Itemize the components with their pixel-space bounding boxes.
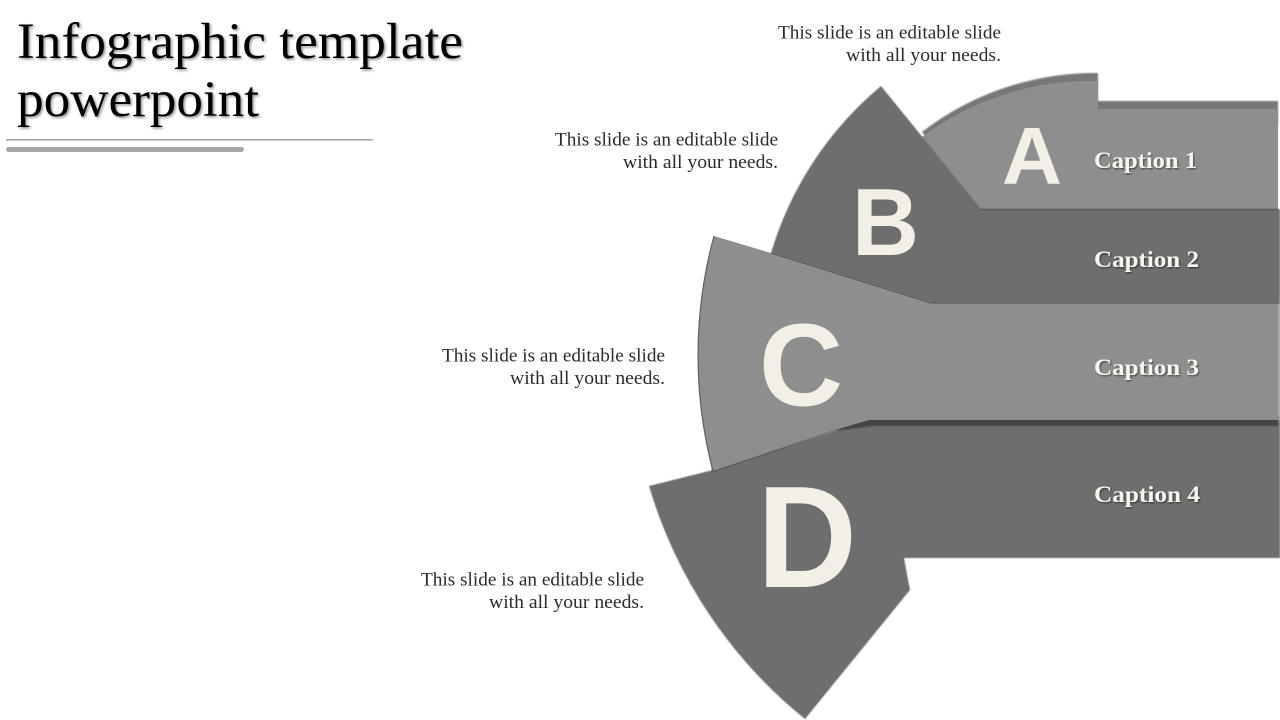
text block D — [421, 570, 644, 613]
title — [17, 14, 463, 128]
letter D: D — [757, 456, 857, 618]
segment D — [649, 420, 1280, 719]
caption 4: Caption 4 — [1094, 482, 1201, 507]
text block C: with all your needs. — [510, 368, 665, 389]
segment C — [698, 236, 1279, 472]
title: Infographic template — [17, 14, 463, 70]
text block B: This slide is an editable slide — [555, 130, 778, 150]
title: powerpoint — [17, 72, 259, 128]
text block A — [778, 22, 1001, 66]
segment B — [771, 86, 1280, 303]
caption 1: Caption 1 — [1094, 148, 1197, 173]
caption 3: Caption 3 — [1094, 355, 1199, 380]
letter B: B — [852, 169, 919, 276]
text block A: This slide is an editable slide — [778, 22, 1001, 44]
letter A: A — [1002, 112, 1062, 202]
caption 2: Caption 2 — [1094, 247, 1199, 272]
text block A: with all your needs. — [846, 45, 1001, 66]
text block B — [555, 130, 778, 173]
text block C — [442, 346, 665, 389]
text block D: with all your needs. — [489, 592, 644, 613]
text block B: with all your needs. — [623, 152, 778, 173]
segment A — [922, 73, 1278, 212]
text block C: This slide is an editable slide — [442, 346, 665, 366]
title underline rules — [6, 139, 373, 152]
letter C: C — [759, 300, 843, 430]
text block D: This slide is an editable slide — [421, 570, 644, 590]
